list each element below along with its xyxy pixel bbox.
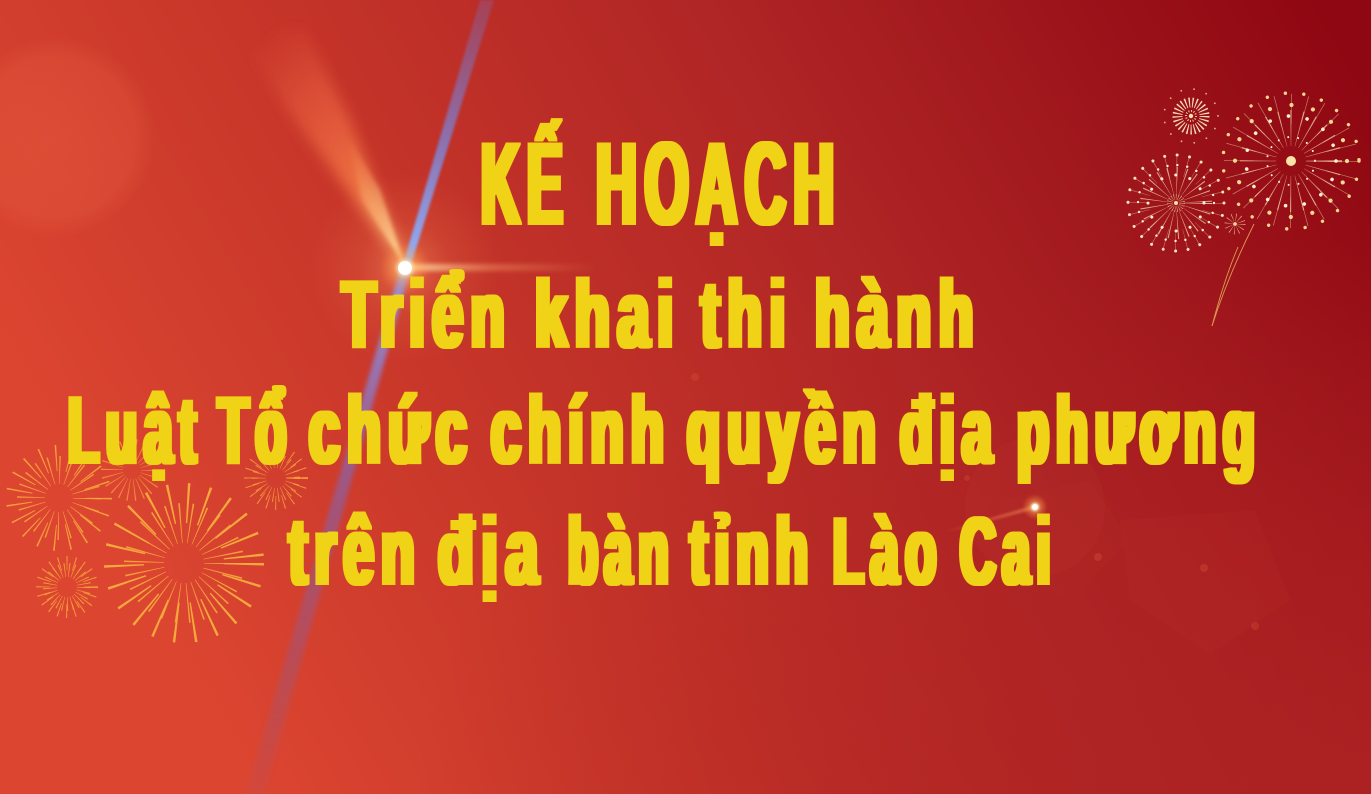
heading line 4: Lào — [833, 498, 943, 605]
heading line 3: chức — [309, 377, 474, 484]
firework trail — [1212, 224, 1254, 326]
firework: lower small — [43, 563, 91, 611]
heading line 4: Cai — [960, 498, 1057, 605]
heading line 4 — [289, 498, 1057, 605]
heading line 3: chính — [491, 377, 671, 484]
firework: tiny spark — [1229, 218, 1241, 230]
heading line 3: Tổ — [218, 377, 293, 484]
title text: HOẠCH — [596, 118, 842, 249]
heading line 1: KẾ — [481, 118, 570, 249]
lens flare light streak — [228, 0, 595, 794]
title text — [68, 118, 1262, 605]
fireworks, bottom left — [19, 450, 301, 623]
heading line 4: trên — [289, 498, 422, 605]
firework: left — [19, 458, 99, 538]
heading line 2: hành — [815, 261, 981, 368]
heading line 3: địa — [900, 377, 999, 484]
firework: medium — [1128, 155, 1224, 251]
heading line 2 — [342, 261, 981, 368]
heading line 1 — [481, 118, 842, 249]
heading line 3: Luật — [68, 377, 203, 484]
heading line 4: tỉnh — [690, 498, 815, 605]
firework: top small — [112, 450, 152, 490]
heading line 3 — [68, 377, 1262, 484]
heading line 2: khai — [535, 261, 681, 368]
firework: large — [1223, 93, 1359, 229]
small lens flare, lower right — [691, 373, 1290, 655]
fireworks, top right — [1128, 89, 1359, 326]
heading line 4: địa — [438, 498, 546, 605]
heading line 3: quyền — [687, 377, 883, 484]
lens flare orb, top left — [0, 37, 155, 237]
firework: small — [1164, 89, 1218, 143]
firework: right small — [251, 453, 301, 503]
heading line 2: thi — [701, 261, 793, 368]
firework: big centre — [124, 503, 244, 623]
heading line 2: Triển — [342, 261, 512, 368]
heading line 4: bàn — [568, 498, 675, 605]
